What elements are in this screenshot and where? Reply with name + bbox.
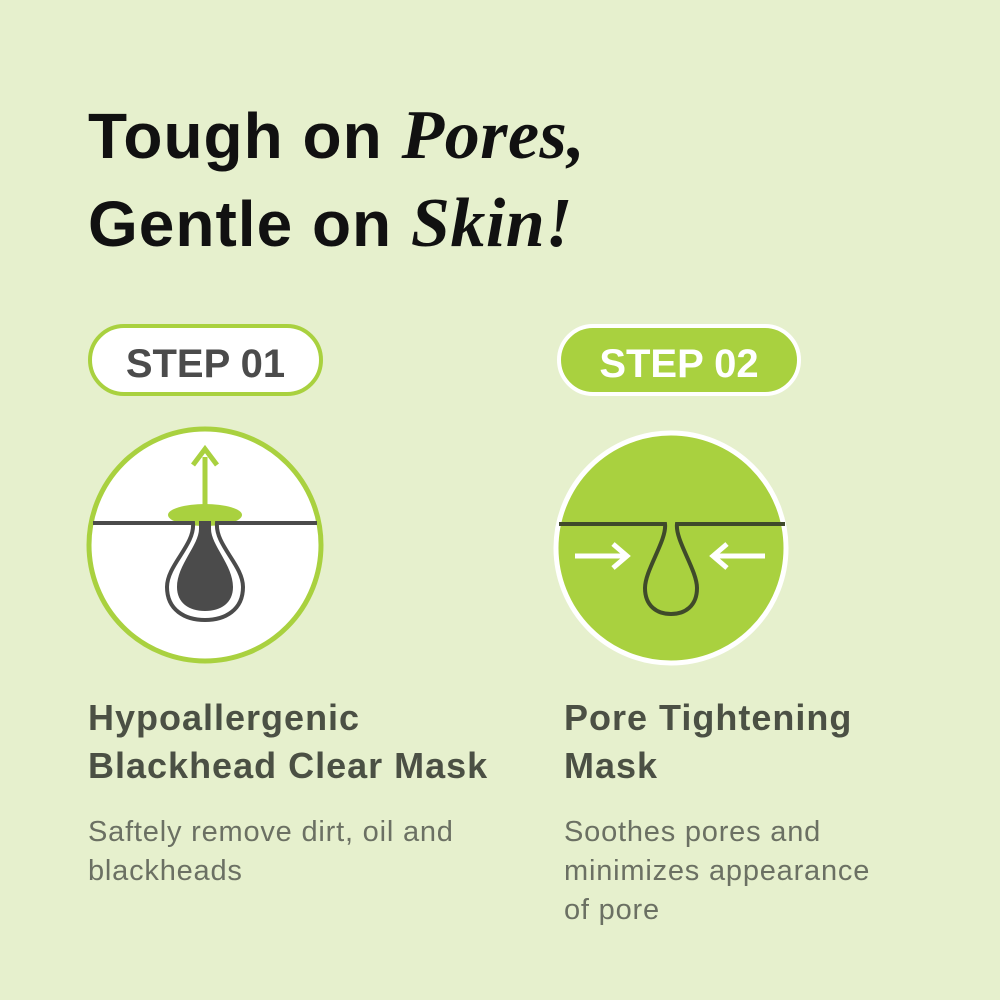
heading 2: Mask [564,745,658,786]
heading 2: Pore Tightening [564,697,852,738]
text 2: Soothes pores and [564,816,821,848]
text 2 [564,816,870,926]
step 01 pill: STEP 01 [126,342,285,386]
title: Tough on Pores, [88,97,585,174]
title: Gentle on Skin! [88,185,573,262]
heading 1: Hypoallergenic [88,697,360,738]
text 1 [88,816,454,887]
icon: pore tightening [554,430,788,666]
text 2: minimizes appearance [564,855,870,887]
step 02 pill [557,324,801,396]
title [88,97,585,262]
heading 2 [564,697,852,786]
text 1: blackheads [88,855,243,887]
text 2: of pore [564,894,660,926]
heading 1: Blackhead Clear Mask [88,745,488,786]
icon: blackhead extraction [86,426,324,664]
heading 1 [88,697,488,786]
text 1: Saftely remove dirt, oil and [88,816,454,848]
step 02 pill: STEP 02 [599,342,759,386]
step 01 pill [88,324,323,396]
